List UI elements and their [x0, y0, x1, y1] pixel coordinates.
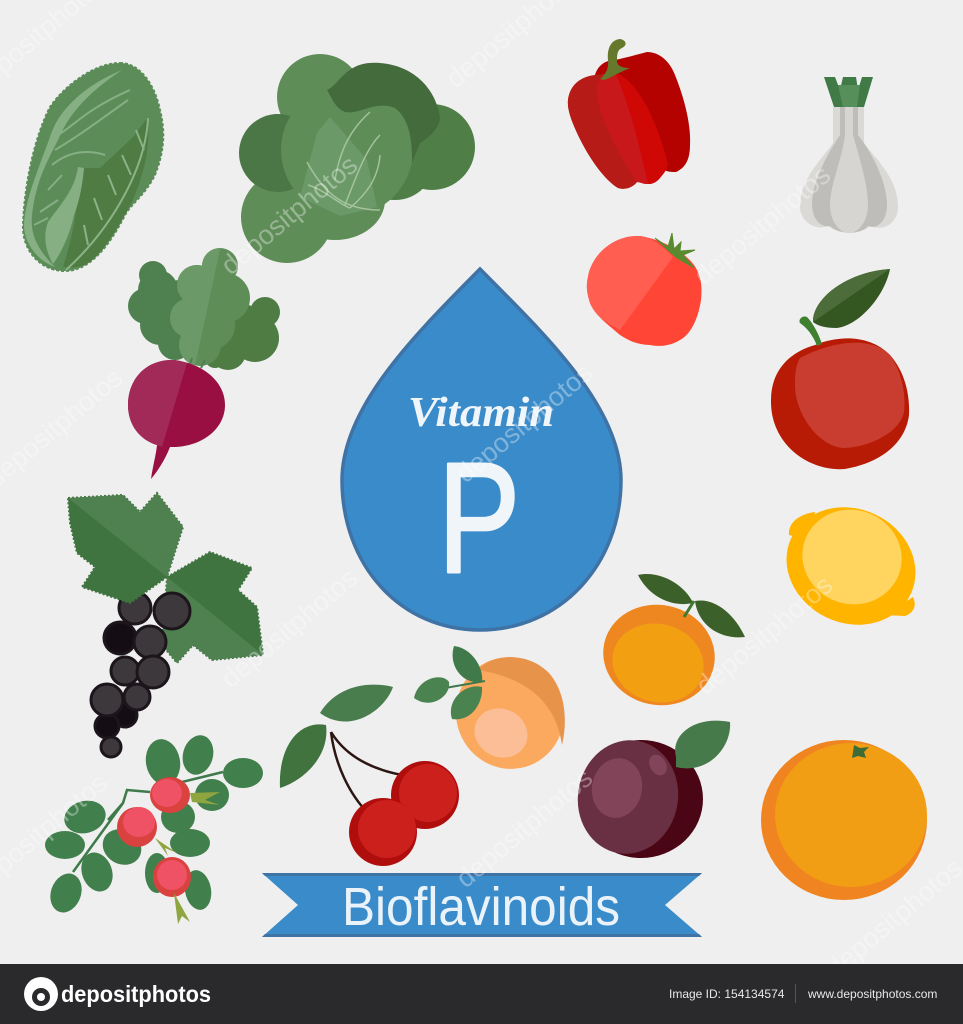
text: website: www.depositphotos.com: [807, 987, 937, 1001]
text: image id: Image ID: 154134574: [669, 987, 785, 1001]
text: Vitamin: Vitamin: [408, 390, 554, 436]
text: Bioflavinoids: Bioflavinoids: [342, 877, 620, 937]
text: P: P: [438, 431, 520, 606]
icon: apricot with leaves: [414, 645, 577, 781]
currant berries: [91, 592, 190, 757]
icon: lemon: [767, 486, 935, 646]
icon: tomato: [587, 233, 702, 346]
icon: plum with leaf: [569, 721, 730, 862]
text: depositphotos: depositphotos: [61, 981, 211, 1007]
watermarks: depositphotos: [688, 160, 836, 291]
watermarks: depositphotos: [215, 563, 363, 694]
icon: peach: [594, 574, 745, 716]
icon: blackcurrant: [68, 493, 263, 757]
watermarks: depositphotos: [215, 150, 363, 281]
icon: rosehip branch: [45, 732, 263, 924]
icon: vitamin drop: [342, 269, 621, 630]
icon: red bell pepper: [568, 39, 690, 189]
lower currant leaf: [162, 552, 263, 663]
ribbon banner: [262, 873, 702, 937]
icon: apple with leaf: [771, 269, 909, 469]
watermarks: depositphotos: [690, 570, 838, 701]
watermarks: depositphotos: [450, 763, 598, 894]
icon: chinese cabbage: [23, 63, 163, 271]
footer bar: [0, 964, 963, 1024]
beet leaves: [128, 248, 280, 370]
upper currant leaf: [68, 493, 183, 603]
icon: garlic: [800, 77, 898, 233]
icon: cherries with leaves: [280, 685, 459, 866]
icon: orange: [761, 740, 927, 900]
icon: beet: [128, 248, 280, 479]
watermarks: depositphotos: [450, 358, 598, 489]
icon: depositphotos logo: [24, 977, 58, 1011]
icon: green cabbage: [239, 54, 475, 263]
